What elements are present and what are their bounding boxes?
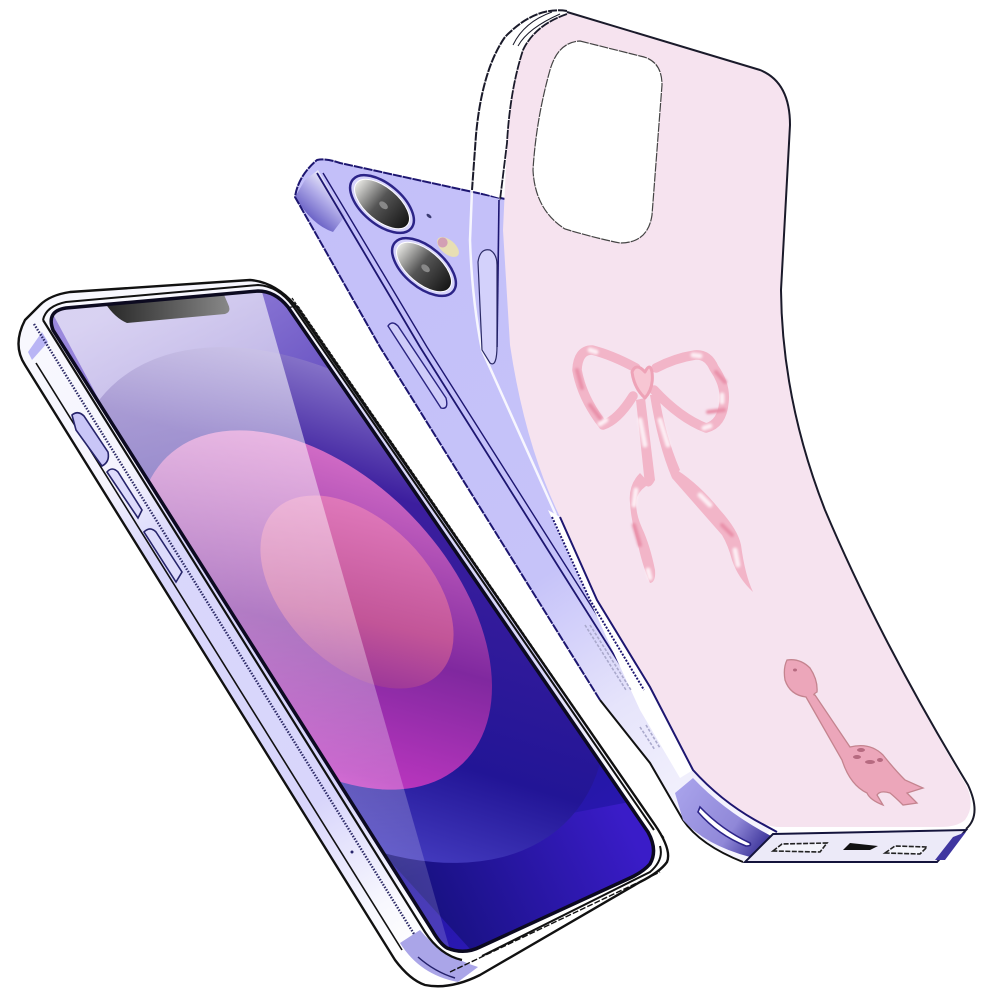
lower wallpaper dark [386, 802, 652, 949]
volume up [107, 469, 142, 518]
notch [107, 296, 230, 323]
side engraving marks [585, 625, 660, 750]
volume down [144, 529, 182, 582]
camera lens bottom [382, 227, 466, 307]
speaker slit side [698, 807, 750, 846]
bow knot [632, 367, 652, 398]
bow tails [630, 395, 753, 592]
screen black border [51, 291, 654, 951]
bottom speaker slit [418, 957, 455, 978]
ports [773, 843, 827, 852]
bow deep folds [577, 370, 732, 545]
pink circle [150, 430, 492, 790]
case outlines [472, 10, 975, 832]
bow shine [590, 350, 738, 578]
inner frame lines [34, 285, 664, 972]
microphone dot [426, 213, 432, 219]
large circle [99, 350, 600, 863]
bottom purple corner [400, 930, 478, 982]
bottom edge with ports [675, 778, 966, 862]
right bottom corner [935, 832, 966, 860]
inner circle [260, 496, 454, 688]
dino body [784, 660, 923, 805]
ribbon bow [577, 350, 753, 592]
glare band [40, 285, 450, 960]
transparent case with pink back [470, 10, 975, 862]
flash [434, 233, 462, 261]
clear case rim over phone [470, 190, 556, 515]
top left lavender corner [28, 332, 48, 360]
side dot [350, 850, 354, 854]
camera lens top [340, 164, 424, 244]
top corner side band [295, 170, 345, 232]
purple lower corner [675, 778, 773, 857]
front phone [17, 278, 670, 988]
side button [388, 323, 447, 408]
upper clear strip [472, 10, 567, 198]
screen [52, 292, 652, 950]
phone body [295, 159, 770, 862]
wallpaper base [52, 292, 652, 950]
lower white edge strip [548, 510, 693, 778]
case button bump [478, 250, 497, 364]
clear case outer [18, 280, 668, 986]
dinosaur [784, 660, 923, 805]
bottom wall [745, 830, 966, 862]
back phone [295, 159, 770, 862]
body outline [295, 159, 743, 862]
dino spots [793, 668, 883, 764]
side switch [72, 413, 108, 466]
pink back panel [503, 13, 971, 827]
bow loops [577, 350, 724, 428]
